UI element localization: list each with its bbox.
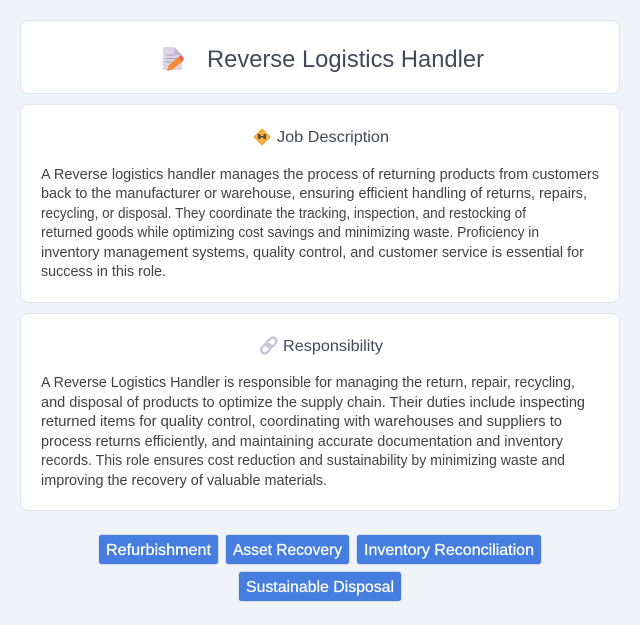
- text block: responsibility: and disposal of products to optimize the supply chain. Their duties include inspecting: [41, 395, 585, 411]
- heading: title text: Reverse Logistics Handler: [207, 46, 484, 73]
- tag: Asset Recovery: Asset Recovery: [233, 542, 342, 559]
- text block: job description: [41, 167, 599, 280]
- panel: responsibility: [20, 314, 620, 510]
- text block: job description: inventory management systems, quality control, and customer service is essential for: [41, 245, 584, 261]
- text block: responsibility: [41, 375, 585, 489]
- text block: responsibility: records. This role ensures cost reduction and sustainability by minimizing waste and: [41, 453, 565, 469]
- panel: job description: [20, 104, 620, 302]
- text block: job description: back to the manufacturer or warehouse, ensuring efficient handling of returns, repairs,: [41, 186, 587, 202]
- tag: Inventory Reconciliation: [356, 534, 542, 564]
- tag: Sustainable Disposal: Sustainable Disposal: [246, 579, 394, 596]
- text block: job description: A Reverse logistics handler manages the process of returning products from customers: [41, 167, 599, 183]
- heading: job description: Job Description: [277, 129, 389, 146]
- text block: job description: returned goods while optimizing cost savings and minimizing waste. Proficiency in: [41, 225, 539, 241]
- text block: responsibility: returned items for quality control, coordinating with warehouses and suppliers to: [41, 414, 562, 430]
- icon: document with pencil: [163, 47, 184, 71]
- heading: responsibility: Responsibility: [283, 338, 383, 355]
- tag: Sustainable Disposal: [238, 572, 402, 602]
- icon: diamond sign: [254, 129, 270, 145]
- panel: title: [20, 20, 620, 94]
- text block: responsibility: process returns efficiently, and maintaining accurate documentation and inventory: [41, 434, 564, 450]
- text block: job description: success in this role.: [41, 264, 166, 280]
- tag: Refurbishment: Refurbishment: [106, 542, 212, 559]
- tag: Asset Recovery: [226, 534, 350, 564]
- icon: chain link: [260, 336, 278, 355]
- tag: Inventory Reconciliation: Inventory Reconciliation: [364, 542, 534, 559]
- text block: job description: recycling, or disposal. They coordinate the tracking, inspection, and restocking of: [41, 206, 527, 222]
- text block: responsibility: A Reverse Logistics Handler is responsible for managing the return, repair, recycling,: [41, 375, 575, 391]
- tag: Refurbishment: [98, 534, 218, 564]
- text block: responsibility: improving the recovery of valuable materials.: [41, 473, 327, 489]
